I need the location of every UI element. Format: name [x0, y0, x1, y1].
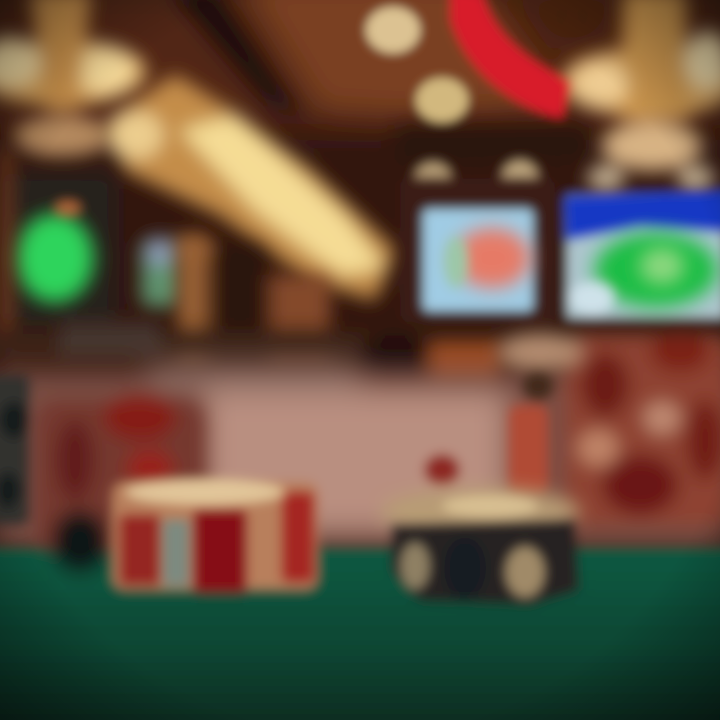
screen: small centre-left display	[142, 238, 178, 306]
ceiling light: top right star	[562, 0, 720, 190]
screen: centre colour display	[400, 178, 555, 323]
ceiling light: diagonal glowing beam	[107, 75, 395, 300]
red ribbon	[450, 0, 572, 118]
chip stack: left red stack	[36, 396, 206, 570]
pillars and doorway	[0, 150, 330, 360]
ceiling light: top left star	[0, 0, 146, 156]
round ceiling lamps	[366, 7, 540, 204]
screen: right blue and green display	[564, 190, 720, 319]
chip stack: front centre dark	[380, 488, 580, 604]
table back wall: pale panel	[0, 362, 720, 550]
green felt table	[0, 548, 720, 720]
chip stack: centre figure	[425, 371, 554, 495]
chip stacks: far right pile	[498, 332, 720, 525]
chip stack: front left red and cream	[112, 479, 318, 592]
chip stack: left dark column	[0, 375, 30, 525]
dark ledge under screens	[0, 322, 720, 385]
screen: left green display	[8, 172, 116, 327]
